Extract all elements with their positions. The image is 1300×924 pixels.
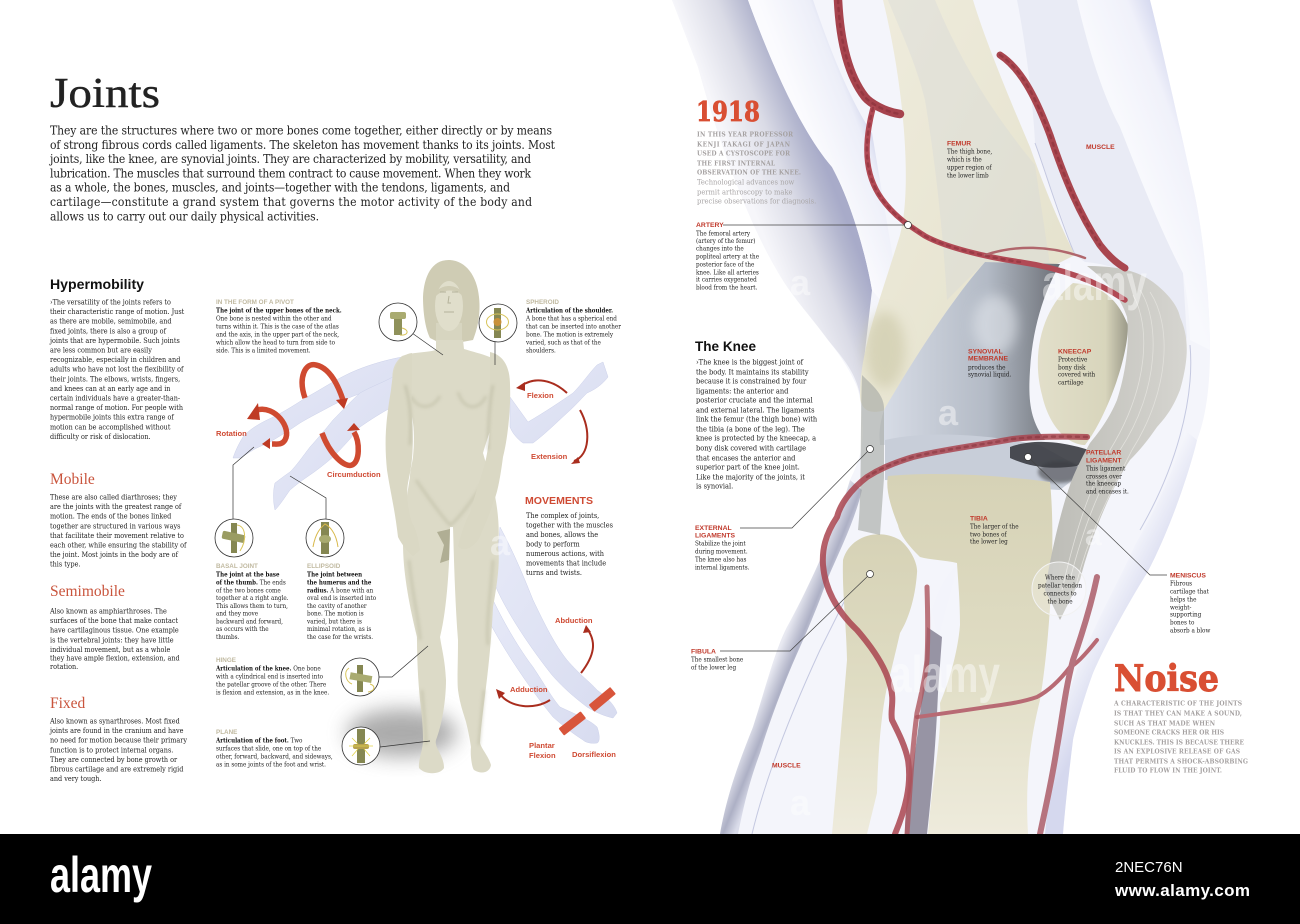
label: external ligaments: LIGAMENTS	[695, 532, 735, 540]
label: patellar tendon: Where the	[1045, 574, 1076, 582]
text: pivot: and the axis, in the upper part of the neck,	[216, 332, 339, 338]
arteries	[823, 0, 1125, 834]
text: movements body: together with the muscles	[526, 520, 614, 530]
torso and legs	[392, 340, 505, 773]
text: hinge: the patellar groove of the other. There	[216, 682, 327, 688]
label: kneecap: cartilage	[1058, 380, 1084, 386]
text: hypermobility body: their joints. The elbows, wrists, fingers,	[50, 374, 180, 383]
text: the knee body: that encases the anterior and	[696, 454, 796, 462]
text: mobile body: each other, while ensuring the stability of	[50, 540, 187, 550]
text: the knee body: the tibia (a bone of the leg). The	[696, 424, 805, 434]
text: hypermobility body: motion can be accomplished without	[50, 422, 171, 431]
label: external ligaments: EXTERNAL	[695, 525, 732, 532]
fold: outer left muscle	[672, 0, 872, 395]
watermark: alamy: a	[1085, 519, 1102, 552]
fold: lower right	[1045, 430, 1197, 834]
text: noise body: A CHARACTERISTIC OF THE JOINTS	[1113, 700, 1242, 708]
label: artery: (artery of the femur)	[696, 238, 755, 245]
heading: semimobile: Semimobile	[50, 583, 125, 600]
label: artery: changes into the	[696, 246, 744, 252]
label: patellar tendon: connects to	[1043, 590, 1077, 598]
label: tibia: the lower leg	[970, 538, 1008, 546]
movement labels: Adduction	[510, 685, 548, 694]
text: 1918 technology note: Technological advances now	[697, 178, 795, 186]
text: mobile body: These are also called diarthroses; they	[50, 492, 177, 502]
text: mobile body: together are structured in various ways	[50, 521, 180, 530]
text: pivot: turns within it. This is the case of the atlas	[216, 324, 339, 330]
neck	[436, 323, 462, 353]
icon: plane joint	[342, 727, 380, 765]
label: patellar tendon: patellar tendon	[1038, 582, 1082, 590]
text: spheroid: bone. The motion is extremely	[526, 332, 614, 338]
icon: hinge joint	[341, 658, 379, 696]
text: ellipsoid: A bone with an	[328, 587, 374, 594]
text: ellipsoid: the cavity of another	[307, 603, 367, 610]
figure: standing woman	[386, 260, 510, 773]
text: noise body: FLUID TO FLOW IN THE JOINT.	[1114, 766, 1222, 774]
text: hinge: Articulation of the knee.	[215, 666, 291, 672]
text: spheroid: that can be inserted into another	[526, 324, 621, 330]
label: meniscus: supporting	[1170, 612, 1202, 618]
ghost leg: adduction	[491, 600, 599, 743]
text: plane: surfaces that slide, one on top of the	[216, 746, 322, 752]
vessel shadow	[905, 627, 942, 834]
floor shadow	[347, 709, 457, 757]
fold: central right muscle	[1017, 0, 1187, 340]
text: hypermobility body: hypermobile joints this extra range of	[50, 413, 174, 422]
ligament fibres	[1062, 290, 1164, 590]
text: spheroid: shoulders.	[526, 348, 556, 354]
panel: hypermobility	[49, 276, 185, 441]
knee illustration	[490, 0, 1210, 834]
text: the knee body: knee is protected by the kneecap, a	[696, 434, 816, 442]
text: fixed body: joints are found in the cranium and have	[49, 726, 184, 735]
text: ellipsoid: oval end is inserted into	[307, 595, 377, 602]
image id: 2NEC76N	[1115, 859, 1183, 876]
text: 1918 body: USED A CYSTOSCOPE FOR	[697, 150, 790, 158]
panel: movements	[525, 495, 614, 577]
kneecap	[1038, 283, 1128, 445]
flexion and abduction arrows	[496, 380, 593, 706]
text: ellipsoid: The joint between	[307, 572, 362, 578]
label: muscle upper: MUSCLE	[1086, 144, 1115, 151]
arm shading	[405, 385, 493, 450]
movement labels: Flexion	[527, 391, 554, 400]
patellar ligament	[1045, 266, 1187, 620]
text: noise body: SOMEONE CRACKS HER OR HIS	[1114, 728, 1224, 736]
label: patellar ligament: PATELLAR	[1086, 450, 1121, 456]
text: the knee body: and external lateral. The ligaments	[696, 406, 815, 414]
right arm	[458, 352, 510, 549]
text: the knee body: ›The knee is the biggest joint of	[696, 358, 804, 366]
label: artery: ARTERY	[696, 222, 724, 229]
text: basal joint: backward and forward,	[216, 618, 283, 625]
text: basal joint: and they move	[216, 610, 259, 618]
label: artery: posterior face of the	[696, 262, 755, 268]
movement labels: Plantar	[529, 741, 555, 750]
callout: 1918	[696, 97, 816, 206]
text: fixed body: and very tough.	[50, 774, 102, 783]
watermark: alamy: alamy	[890, 646, 1000, 704]
text: basal joint: together at a right angle.	[216, 595, 289, 602]
heading: movements: MOVEMENTS	[525, 495, 593, 507]
text: semimobile body: Also known as amphiarthroses. The	[49, 606, 167, 616]
fold: second left muscle	[748, 0, 905, 330]
text: the knee body: link the femur (the thigh bone) with	[696, 414, 818, 424]
label: meniscus: weight-	[1170, 604, 1192, 612]
intro text	[48, 124, 556, 223]
label: patellar ligament: This ligament	[1086, 466, 1126, 472]
text: hypermobility body: adults who have not lost the flexibility of	[50, 365, 184, 374]
panel: semimobile	[49, 583, 180, 671]
label: artery: it carries oxygenated	[696, 276, 757, 284]
icon: basal joint	[215, 519, 253, 557]
label: tibia: TIBIA	[970, 516, 988, 522]
ghost leg: abduction	[495, 527, 617, 718]
watermark: alamy: a	[490, 522, 511, 563]
text: basal joint: of the two bones come	[216, 587, 281, 594]
text: pivot: One bone is nested within the other and	[216, 316, 332, 322]
text: mobile body: motion. The ends of the bones linked	[50, 512, 171, 521]
label: patellar ligament: the kneecap	[1086, 480, 1121, 488]
femur shaft translucent overlay	[888, 0, 1050, 300]
text: noise body: KNUCKLES. THIS IS BECAUSE THERE	[1114, 738, 1244, 746]
red bands: plantar and dorsiflexion	[559, 687, 616, 736]
label: artery: popliteal artery at the	[696, 254, 760, 260]
bangs	[434, 286, 464, 298]
label: fibula: The smallest bone	[691, 656, 744, 664]
label: meniscus: cartilage that	[1170, 588, 1210, 596]
label: artery: blood from the heart.	[696, 284, 758, 292]
text: semimobile body: rotation.	[50, 662, 78, 671]
face	[435, 281, 463, 331]
meniscus dark gap	[1010, 442, 1095, 468]
artery: right vertical	[1040, 577, 1097, 834]
watermark: alamy: a	[938, 392, 959, 433]
text: hypermobility body: normal range of motion. For people with	[50, 403, 183, 412]
facial features	[440, 292, 458, 312]
heading: fixed: Fixed	[50, 695, 86, 712]
fold: outer right muscle	[1077, 0, 1210, 350]
text: basal joint: as occurs with the	[216, 626, 269, 633]
label: synovial membrane: MEMBRANE	[968, 356, 1008, 362]
artery: knee encircling	[823, 437, 1087, 834]
text: semimobile body: they have ample flexion, extension, and	[50, 654, 180, 662]
text: spheroid: SPHEROID	[526, 299, 559, 306]
label: meniscus: MENISCUS	[1170, 572, 1206, 580]
label: external ligaments: Stabilize the joint	[695, 540, 746, 548]
joint plate	[885, 435, 1085, 490]
bone: fibula	[832, 534, 917, 834]
text: hypermobility body: difficulty or risk of dislocation.	[50, 432, 151, 441]
icon: ellipsoid joint	[306, 519, 344, 557]
label: patellar ligament: crosses over	[1086, 474, 1122, 480]
text: basal joint: The joint at the base	[216, 572, 280, 578]
label: synovial membrane: SYNOVIAL	[968, 348, 1003, 356]
text: hypermobility body: ›The versatility of the joints refers to	[50, 298, 171, 306]
footer url: www.alamy.com	[1114, 881, 1250, 900]
text: basal joint: of the thumb.	[216, 580, 258, 586]
text: noise body: IS THAT THEY CAN MAKE A SOUND,	[1114, 710, 1242, 718]
callout: noise	[1113, 658, 1248, 774]
label: meniscus: absorb a blow	[1170, 628, 1210, 634]
movement labels: Circumduction	[327, 470, 381, 479]
watermark: alamy: alamy	[1042, 255, 1147, 311]
label: patellar ligament: and encases it.	[1086, 488, 1129, 496]
text: ellipsoid: minimal rotation, as is	[307, 626, 371, 633]
panel: mobile	[50, 471, 187, 569]
rotation arrows	[247, 365, 360, 465]
hair	[423, 260, 480, 342]
text: plane: PLANE	[216, 729, 237, 736]
intro text: joints, like the knee, are synovial joints. They are characterized by mobility, versatility, and	[48, 152, 531, 166]
text: basal joint: This allows them to turn,	[216, 603, 288, 610]
label: artery: The femoral artery	[696, 230, 751, 238]
text: noise body: THAT PERMITS A SHOCK-ABSORBING	[1114, 758, 1248, 766]
text: semimobile body: surfaces of the bone that make contact	[50, 616, 178, 625]
text: hypermobility body: are less common but are easily	[50, 346, 152, 354]
text: 1918 body: OBSERVATION OF THE KNEE.	[697, 168, 801, 176]
movement labels	[216, 391, 616, 760]
label: femur: upper region of	[947, 164, 993, 172]
movement labels: Flexion	[529, 751, 556, 760]
artery: posterior	[1000, 55, 1125, 268]
text: mobile body: the joint. Most joints in the body are of	[50, 550, 179, 559]
text: movements body: The complex of joints,	[526, 511, 599, 520]
footer logo: alamy	[50, 847, 152, 903]
label: patellar tendon: the bone	[1047, 598, 1073, 606]
text: ellipsoid: radius.	[307, 587, 328, 594]
text: plane: Two	[289, 738, 303, 744]
text: hinge: One bone	[291, 666, 321, 672]
heading: hypermobility: Hypermobility	[50, 276, 144, 292]
leader lines: knee labels	[720, 225, 1167, 651]
text: movements body: turns and twists.	[526, 568, 582, 577]
text: semimobile body: individual movement, but as a whole	[50, 645, 171, 654]
watermark: alamy	[490, 255, 1147, 823]
ghost arm: rotation	[233, 357, 402, 458]
label: external ligaments: The knee also has	[695, 556, 746, 564]
fold: lower left dark	[720, 480, 862, 834]
left arm	[386, 353, 420, 556]
text: plane: Articulation of the foot.	[215, 738, 289, 744]
label: synovial membrane: produces the	[968, 364, 1006, 372]
text: mobile body: that facilitate their movement relative to	[50, 531, 184, 540]
tibia cream strip notch	[932, 566, 957, 640]
title: Joints	[50, 71, 160, 117]
label: external ligaments: during movement.	[695, 548, 748, 556]
label: patellar ligament: LIGAMENT	[1086, 458, 1122, 464]
icon: spheroid joint	[479, 304, 517, 342]
label: meniscus: Fibrous	[1170, 580, 1192, 588]
text: hypermobility body: joints that are hypermobile. Such joints	[49, 336, 180, 345]
text: 1918 body: THE FIRST INTERNAL	[697, 160, 776, 168]
text: fixed body: fibrous cartilage and are extremely rigid	[50, 764, 183, 774]
heading: mobile: Mobile	[50, 471, 95, 488]
movement labels: Abduction	[555, 616, 593, 625]
label: femur: which is the	[947, 156, 982, 164]
text: 1918 technology note: permit arthroscopy to make	[697, 188, 793, 196]
artery: lower crossing	[917, 640, 1097, 717]
heading: the knee: The Knee	[695, 338, 756, 354]
text: noise body: SUCH AS THAT MADE WHEN	[1114, 720, 1216, 728]
label: artery: knee. Like all arteries	[696, 270, 759, 276]
watermark: alamy: a	[790, 262, 811, 303]
text: semimobile body: have cartilaginous tissue. One example	[50, 626, 179, 635]
text: hypermobility body: and knees can at an early age and in	[50, 384, 170, 393]
label: tibia: The larger of the	[970, 524, 1019, 530]
external ligament	[858, 375, 884, 535]
text: hypermobility body: fixed joints, there is also a group of	[50, 326, 167, 335]
intro text: of strong fibrous cords called ligaments. The skeleton has movement thanks to its joints. Most	[50, 138, 556, 152]
label: femur: the lower limb	[947, 172, 989, 180]
ghost limbs: movement positions	[233, 357, 617, 743]
text: movements body: body to perform	[526, 540, 581, 548]
text: the knee body: because it is constrained by four	[696, 376, 807, 386]
intro text: They are the structures where two or more bones come together, either directly or by means	[50, 124, 552, 138]
leg silhouette	[672, 0, 1210, 834]
text: ellipsoid: the case for the wrists.	[307, 634, 373, 641]
text: hypermobility body: certain individuals have a greater-than-	[50, 394, 180, 402]
label: femur: FEMUR	[947, 140, 971, 148]
label: meniscus: helps the	[1170, 596, 1197, 604]
panel: the knee	[695, 338, 818, 490]
intro text: lubrication. The muscles that surround them contract to cause movement. When they work	[50, 166, 531, 180]
text: basal joint: BASAL JOINT	[216, 563, 258, 570]
text: hypermobility body: recognizable, especially in children and	[50, 355, 180, 364]
meniscus shadow	[1038, 461, 1082, 483]
membrane highlights	[973, 295, 1017, 355]
artery: tibial	[907, 587, 928, 834]
movement labels: Rotation	[216, 429, 247, 438]
label: muscle lower: MUSCLE	[772, 762, 801, 770]
label: kneecap: covered with	[1058, 372, 1096, 378]
footer band	[0, 834, 1300, 924]
intro text: as a whole, the bones, muscles, and joints—together with the tendons, ligaments, and	[50, 181, 510, 195]
text: fixed body: no need for motion because their primary	[50, 736, 187, 745]
text: pivot: The joint of the upper bones of the neck.	[216, 308, 342, 314]
label: synovial membrane: synovial liquid.	[968, 372, 1011, 378]
femur lower shading	[865, 312, 905, 388]
ghost arm: flexion	[510, 362, 608, 443]
text: movements body: and bones, allows the	[526, 530, 598, 539]
text: mobile body: are the joints with the greatest range of	[50, 502, 182, 511]
text: fixed body: They are connected by bone growth or	[50, 755, 178, 764]
text: mobile body: this type.	[50, 560, 80, 569]
text: the knee body: bony disk covered with cartilage	[696, 444, 806, 452]
text: hypermobility body: as there are mobile, semimobile, and	[50, 317, 172, 326]
watermark: alamy: a	[790, 782, 811, 823]
bone: femur	[860, 0, 1075, 412]
text: ellipsoid: the humerus and the	[307, 580, 372, 586]
text: the knee body: Like the majority of the joints, it	[696, 472, 805, 482]
label: femur: The thigh bone,	[947, 148, 992, 156]
text: ellipsoid: ELLIPSOID	[307, 563, 341, 570]
ghost arm: circumduction	[274, 375, 396, 510]
body shading	[409, 392, 493, 745]
heading: noise: Noise	[1114, 658, 1219, 700]
text: semimobile body: is the vertebral joints: they have little	[50, 635, 174, 644]
text: hypermobility body: their characteristic range of motion. Just	[50, 307, 185, 316]
text: pivot: which allow the head to turn from side to	[216, 340, 336, 346]
crotch shadow	[437, 529, 450, 563]
movement labels: Extension	[531, 452, 568, 461]
text: the knee body: superior part of the knee joint.	[696, 462, 800, 472]
label: external ligaments: internal ligaments.	[695, 564, 750, 572]
leader dots	[866, 222, 1032, 578]
artery: branch	[985, 248, 1085, 258]
text: plane: other, forward, backward, and sideways,	[216, 754, 333, 760]
artery: upper femoral	[838, 0, 900, 114]
text: 1918 body: KENJI TAKAGI OF JAPAN	[697, 140, 791, 148]
heading: 1918: 1918	[696, 97, 760, 128]
intro text: cartilage—constitute a grand system that governs the motor activity of the body and	[50, 195, 532, 209]
text: fixed body: Also known as synarthroses. Most fixed	[49, 716, 180, 726]
text: ellipsoid: varied, but there is	[306, 618, 362, 625]
fold lines	[752, 143, 1191, 834]
text: hinge: with a cylindrical end is inserted into	[216, 674, 324, 680]
text: the knee body: is synovial.	[696, 482, 733, 490]
text: hinge: HINGE	[216, 657, 236, 664]
text: the knee body: the body. It maintains its stability	[696, 368, 809, 376]
panel: fixed	[49, 695, 187, 783]
movement labels: Dorsiflexion	[572, 750, 616, 759]
label: kneecap: KNEECAP	[1058, 348, 1092, 356]
label: fibula: of the lower leg	[691, 664, 736, 672]
label: kneecap: Protective	[1058, 356, 1088, 364]
artery texture	[838, 0, 1100, 477]
label: kneecap: bony disk	[1058, 364, 1086, 372]
leader lines: joints	[233, 333, 495, 747]
label: tibia: two bones of	[970, 532, 1007, 538]
text: movements body: numerous actions, with	[526, 549, 605, 558]
text: spheroid: A bone that has a spherical end	[525, 316, 617, 322]
label: meniscus: bones to	[1170, 620, 1195, 626]
text: spheroid: varied, such as that of the	[525, 340, 602, 346]
text: the knee body: posterior cruciate and the internal	[696, 396, 813, 404]
text: 1918 body: IN THIS YEAR PROFESSOR	[697, 130, 793, 138]
synovial membrane	[879, 262, 1060, 445]
text: movements body: movements that include	[526, 558, 606, 568]
tendon connection circle	[1032, 562, 1086, 616]
text: 1918 technology note: precise observations for diagnosis.	[697, 196, 816, 206]
text: spheroid: Articulation of the shoulder.	[525, 308, 613, 314]
text: basal joint: thumbs.	[216, 634, 239, 641]
text: fixed body: function is to protect internal organs.	[50, 745, 173, 754]
text: ellipsoid: bone. The motion is	[307, 610, 364, 618]
intro text: allows us to carry out our daily physical activities.	[50, 209, 319, 223]
artery: popliteal loop	[867, 108, 1125, 300]
text: pivot: side. This is a limited movement.	[216, 348, 311, 354]
text: noise body: IS AN EXPLOSIVE RELEASE OF GAS	[1114, 748, 1240, 756]
text: basal joint: The ends	[258, 580, 286, 586]
text: the knee body: ligaments: the anterior and	[696, 386, 789, 396]
icon: pivot joint	[379, 303, 417, 341]
text: hinge: is flexion and extension, as in the knee.	[216, 690, 329, 696]
text: plane: as in some joints of the foot and wrist.	[216, 762, 326, 768]
label: fibula: FIBULA	[691, 648, 716, 656]
bone: tibia	[887, 474, 1052, 834]
text: pivot: IN THE FORM OF A PIVOT	[216, 299, 294, 306]
